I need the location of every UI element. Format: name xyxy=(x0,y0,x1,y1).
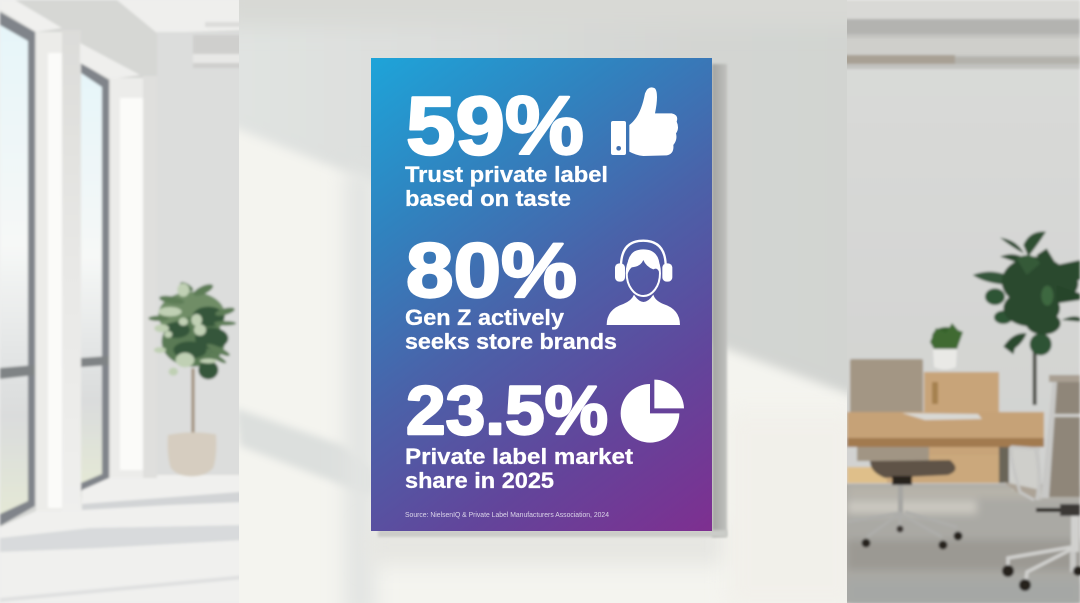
ceiling xyxy=(840,0,1080,19)
number: 80%: 80% xyxy=(406,228,577,314)
front chair xyxy=(1002,375,1080,591)
small plant xyxy=(930,323,963,370)
floor xyxy=(0,475,245,603)
icon: pie chart xyxy=(621,380,684,443)
cabinet xyxy=(847,372,1009,483)
stat block: 80 percent xyxy=(405,228,680,354)
left office scene xyxy=(0,0,245,603)
table xyxy=(847,412,1044,447)
icon: thumbs up xyxy=(611,87,678,156)
window one xyxy=(0,12,35,526)
plant left xyxy=(148,280,236,476)
number: 59%: 59% xyxy=(406,79,584,172)
right office scene xyxy=(840,0,1080,603)
ceiling xyxy=(117,0,245,33)
label: market share: share in 2025 xyxy=(405,468,554,493)
large plant xyxy=(973,231,1080,405)
poster xyxy=(371,58,712,531)
window two xyxy=(81,63,109,491)
duct xyxy=(840,19,1080,69)
ceiling duct xyxy=(193,22,245,68)
chair behind table xyxy=(847,359,962,550)
label: market share: Private label market xyxy=(405,444,634,469)
back wall xyxy=(157,32,245,477)
pier two xyxy=(110,78,143,478)
icon: person with headphones xyxy=(607,241,680,325)
source line: Source: NielsenIQ & Private Label Manufacturers Association, 2024 xyxy=(405,512,609,519)
stat block: 23.5 percent xyxy=(405,372,684,493)
label: gen z: Gen Z actively xyxy=(405,305,564,330)
label: gen z: seeks store brands xyxy=(405,329,617,354)
floor xyxy=(840,484,1080,603)
poster shadow xyxy=(378,64,727,537)
poster background xyxy=(371,58,712,531)
stat block: 59 percent xyxy=(405,79,678,211)
label: trust: Trust private label xyxy=(405,162,608,187)
label: trust: based on taste xyxy=(405,186,571,211)
pier one xyxy=(36,32,62,511)
number: 23.5%: 23.5% xyxy=(406,372,608,449)
central wall xyxy=(220,0,880,603)
